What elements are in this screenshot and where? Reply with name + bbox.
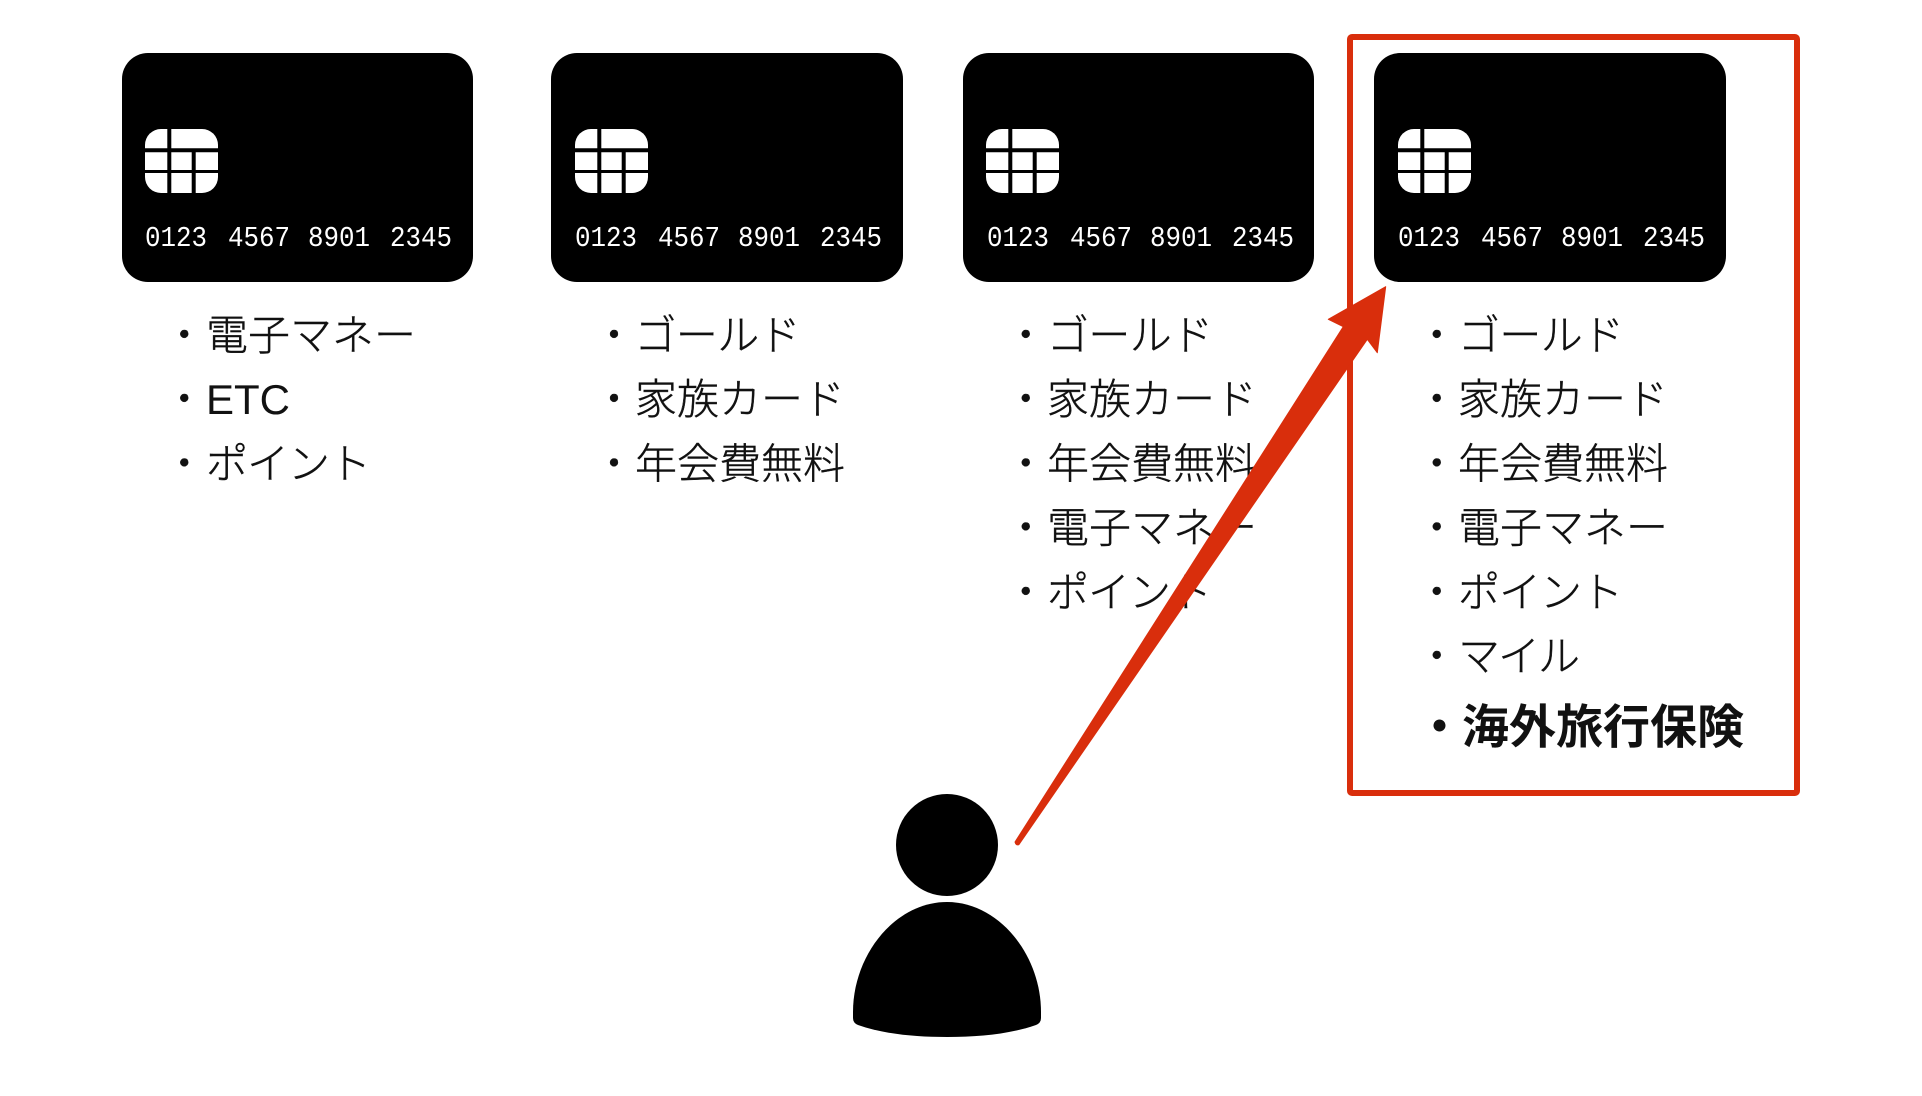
feature list: card 4: ・ [1416,633,1458,680]
feature list: card 4: ・ [1416,504,1458,552]
card number 1 [145,222,452,255]
feature list: card 4: ・ [1416,440,1458,488]
feature list: card 4: マイル [1458,633,1578,680]
panel: card 3 [963,53,1314,282]
highlighted feature: ・ [1416,700,1463,754]
feature list: card 2: ・ [593,312,635,359]
card number 1: 4567 [228,222,290,255]
feature list: card 1: ポイント [206,440,370,488]
feature list: card 1: ・ [163,376,205,423]
card number 3: 2345 [1232,222,1294,255]
panel: card 1 [122,53,473,282]
icon: chip 3 [986,129,1059,193]
feature list: card 2: 家族カード [635,376,845,423]
card number 4: 8901 [1561,222,1623,255]
icon: chip 4 [1398,129,1471,193]
feature list: card 3: ・ [1005,312,1047,359]
feature list: card 3 [1005,312,1257,616]
feature list: card 3: ポイント [1047,569,1211,616]
card number 1: 0123 [145,222,207,255]
card number 4: 4567 [1481,222,1543,255]
card number 2: 4567 [658,222,720,255]
card number 3: 8901 [1150,222,1212,255]
highlighted feature: 海外旅行保険 [1462,700,1744,754]
feature list: card 2: ・ [593,440,635,488]
feature list: card 4: 年会費無料 [1458,440,1668,488]
feature list: card 4: ゴールド [1458,312,1624,359]
feature list: card 1: ・ [163,312,205,359]
panel: card 4 [1374,53,1726,282]
arrow [1015,287,1386,845]
feature list: card 2: 年会費無料 [635,440,845,488]
card number 3: 0123 [987,222,1049,255]
feature list: card 4: ・ [1416,376,1458,423]
feature list: card 2: ・ [593,376,635,423]
feature list: card 3: 家族カード [1047,376,1257,423]
feature list: card 1: 電子マネー [206,312,416,359]
feature list: card 3: ・ [1005,440,1047,488]
card number 4 [1398,222,1705,255]
feature list: card 4: 家族カード [1458,376,1668,423]
feature list: card 1: ETC [206,376,290,423]
feature list: card 4 [1416,312,1744,754]
feature list: card 3: ゴールド [1047,312,1213,359]
icon: chip 1 [145,129,218,193]
feature list: card 3: ・ [1005,569,1047,616]
feature list: card 4: ・ [1416,312,1458,359]
panel: card 2 [551,53,903,282]
feature list: card 1: ・ [163,440,205,488]
feature list: card 4: ポイント [1458,569,1622,616]
card number 2: 2345 [820,222,882,255]
feature list: card 3: 電子マネー [1047,504,1257,552]
card number 3 [987,222,1294,255]
card number 1: 2345 [390,222,452,255]
feature list: card 2: ゴールド [634,312,800,359]
feature list: card 4: 電子マネー [1458,504,1668,552]
card number 3: 4567 [1070,222,1132,255]
card number 4: 0123 [1398,222,1460,255]
feature list: card 3: 年会費無料 [1047,440,1257,488]
feature list: card 1 [163,312,416,488]
card number 2: 0123 [575,222,637,255]
card number 1: 8901 [308,222,370,255]
feature list: card 3: ・ [1005,376,1047,423]
feature list: card 3: ・ [1005,504,1047,552]
card number 2 [575,222,882,255]
icon: person [853,794,1041,1037]
card number 4: 2345 [1643,222,1705,255]
card number 2: 8901 [738,222,800,255]
icon: chip 2 [575,129,648,193]
feature list: card 4: ・ [1416,569,1458,616]
highlight box [1350,37,1797,793]
feature list: card 2 [593,312,845,488]
